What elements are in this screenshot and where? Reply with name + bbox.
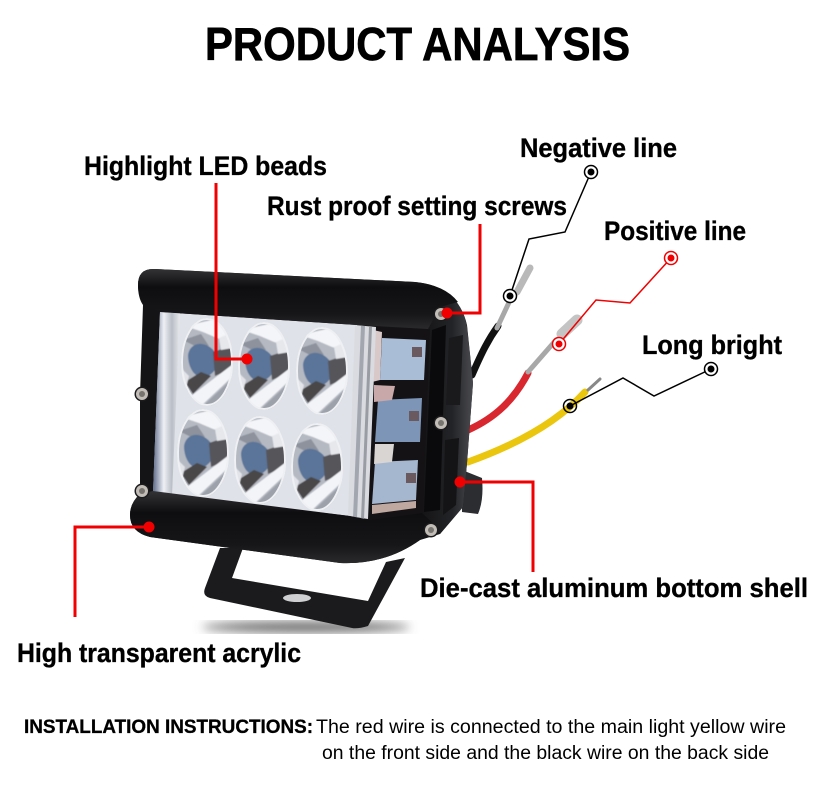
wires	[468, 268, 600, 462]
label: Positive line	[552, 216, 746, 350]
label: Positive line: Positive line	[604, 216, 746, 246]
label: Long bright	[564, 330, 782, 412]
edge strip right	[348, 325, 376, 519]
installation instructions: The red wire is connected to the main light yellow wire	[316, 717, 786, 738]
front reflector panel	[153, 312, 357, 516]
housing silhouette	[130, 269, 473, 563]
LED reflectors	[180, 317, 234, 408]
edge strip left	[153, 312, 180, 496]
red wire	[468, 373, 528, 430]
yellow wire	[468, 392, 585, 462]
label: High transparent acrylic: High transparent acrylic	[17, 638, 301, 668]
title: PRODUCT ANALYSIS	[205, 18, 630, 70]
label: Rust proof setting screws: Rust proof setting screws	[267, 191, 567, 221]
label: Negative line: Negative line	[520, 133, 677, 163]
top frame	[138, 269, 458, 329]
right side shell	[422, 300, 473, 534]
bottom frame	[130, 491, 438, 563]
installation instructions: INSTALLATION INSTRUCTIONS:	[24, 717, 313, 738]
label: Long bright: Long bright	[642, 330, 782, 360]
installation instructions: on the front side and the black wire on the back side	[322, 743, 769, 764]
label: Rust proof setting screws	[267, 191, 567, 318]
label: High transparent acrylic	[17, 522, 301, 668]
side LED chips	[380, 338, 426, 380]
installation instructions	[24, 717, 786, 764]
label: Highlight LED beads: Highlight LED beads	[84, 151, 327, 181]
mount clamp	[462, 470, 482, 514]
label: Negative line	[504, 133, 677, 302]
label: Die-cast aluminum bottom shell	[420, 476, 808, 603]
label: Highlight LED beads	[84, 151, 327, 364]
side LED compartment	[370, 327, 430, 520]
screws	[434, 306, 448, 322]
label: Die-cast aluminum bottom shell: Die-cast aluminum bottom shell	[420, 573, 808, 603]
product photo: LED work light	[130, 268, 600, 632]
mounting bracket	[204, 548, 405, 628]
ground shadow	[202, 622, 410, 632]
black wire	[472, 326, 498, 375]
